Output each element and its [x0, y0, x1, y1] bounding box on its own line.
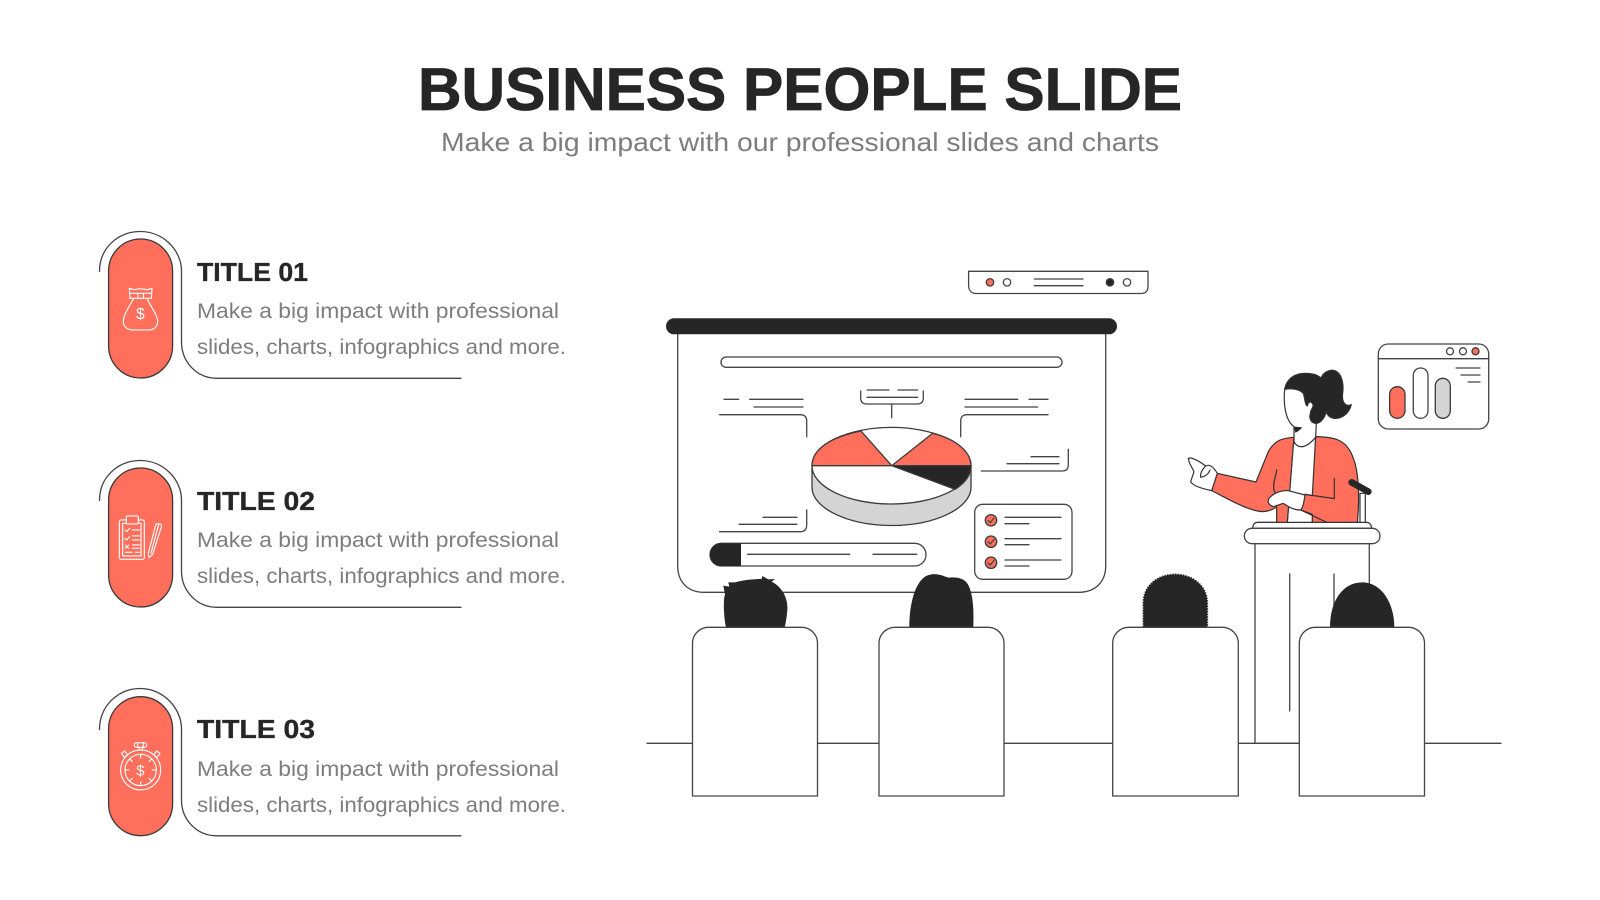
body text: slides, charts, infographics and more.	[197, 565, 566, 588]
body text	[197, 300, 566, 359]
icon: money bag: $	[136, 306, 145, 323]
jacket left	[1212, 437, 1294, 522]
callouts left	[720, 399, 807, 532]
audience chair 4	[1299, 582, 1424, 796]
icon: stopwatch: $	[136, 763, 144, 779]
folded hand	[1268, 491, 1305, 510]
body text: Make a big impact with professional	[197, 529, 559, 552]
panel: title 01	[100, 232, 566, 378]
panel: title 03	[100, 688, 566, 836]
microphone	[1352, 482, 1368, 492]
body text: Make a big impact with professional	[197, 300, 559, 323]
pill	[109, 468, 173, 607]
floor line	[647, 742, 1501, 744]
panel: title 02	[100, 460, 566, 607]
body text: Make a big impact with professional	[197, 758, 559, 781]
body text	[197, 758, 566, 817]
pill	[109, 239, 173, 378]
device: top toolbar	[969, 271, 1148, 294]
pill	[109, 697, 173, 836]
microphone stand	[1360, 493, 1365, 522]
checklist card	[975, 504, 1072, 579]
heading: TITLE 02	[197, 488, 315, 516]
body text	[197, 529, 566, 588]
pie chart	[812, 427, 971, 526]
outline arc	[100, 232, 461, 378]
callouts right	[961, 399, 1068, 471]
icon: clipboard and pen	[119, 516, 162, 559]
title: BUSINESS PEOPLE SLIDE	[418, 56, 1182, 123]
jacket folds	[1274, 470, 1334, 522]
neck and face	[1284, 387, 1316, 447]
outline arc	[100, 460, 461, 607]
hair	[1285, 370, 1351, 423]
outline arc	[100, 688, 461, 836]
chin shadow	[1294, 427, 1302, 433]
audience chair 3	[1113, 574, 1238, 796]
body text: slides, charts, infographics and more.	[197, 794, 566, 817]
chart window	[1378, 344, 1489, 429]
illustration: presentation scene	[647, 271, 1501, 796]
subtitle: Make a big impact with our professional slides and charts	[441, 127, 1159, 157]
icon: money bag	[123, 288, 158, 330]
presentation board	[666, 318, 1117, 592]
pointing hand	[1188, 458, 1217, 491]
shirt	[1287, 437, 1316, 522]
progress bar	[710, 543, 926, 566]
body text: slides, charts, infographics and more.	[197, 336, 566, 359]
heading: TITLE 01	[197, 259, 308, 287]
callout top	[861, 390, 923, 418]
audience chair 2	[879, 574, 1004, 796]
jacket right	[1301, 437, 1359, 522]
heading: TITLE 03	[197, 716, 315, 744]
audience chair 1	[692, 576, 818, 796]
lectern	[1244, 522, 1380, 743]
icon: stopwatch	[121, 743, 161, 790]
presenter	[1188, 370, 1368, 522]
